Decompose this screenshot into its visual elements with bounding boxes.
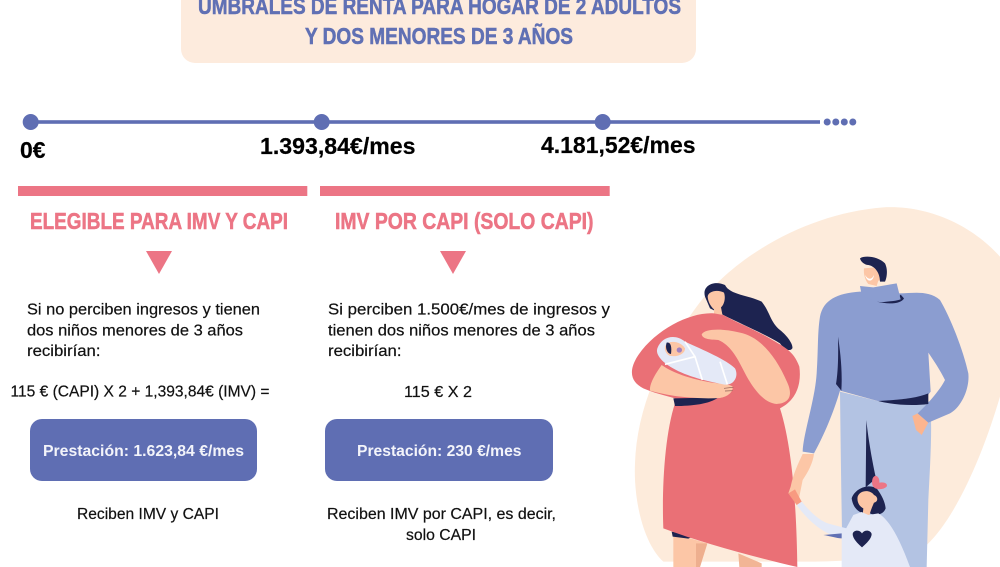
description right: tienen dos niños menores de 3 años	[328, 322, 595, 340]
sweater	[803, 292, 969, 453]
description left: Si no perciben ingresos y tienen	[27, 302, 260, 318]
background blob	[635, 207, 1000, 562]
pants	[840, 392, 931, 567]
hair	[852, 486, 886, 515]
panel heading left: ELEGIBLE PARA IMV Y CAPI	[30, 208, 288, 234]
arrow right	[440, 251, 466, 274]
arrow left	[146, 251, 172, 274]
sweater shadows	[836, 337, 842, 391]
upper arm	[702, 330, 790, 404]
formula right: 115 € X 2	[404, 384, 472, 401]
mother	[632, 283, 800, 567]
title text	[198, 0, 681, 49]
benefit box left	[30, 419, 257, 481]
title banner	[181, 0, 696, 63]
illustration: family	[632, 207, 1000, 567]
threshold label 0: 0€	[20, 137, 46, 163]
title text: Y DOS MENORES DE 3 AÑOS	[305, 22, 573, 49]
note right: Reciben IMV por CAPI, es decir,	[327, 506, 556, 523]
description right: Si perciben 1.500€/mes de ingresos y	[328, 302, 610, 318]
hand in pocket	[912, 413, 928, 435]
child hand	[788, 489, 802, 505]
child	[788, 476, 910, 567]
heart	[853, 531, 872, 547]
sweater	[842, 512, 910, 567]
baby	[657, 337, 736, 385]
income timeline	[23, 114, 856, 130]
head	[864, 267, 884, 286]
bow	[872, 476, 887, 489]
panel heading right: IMV POR CAPI (SOLO CAPI)	[335, 208, 594, 234]
description left: recibirían:	[27, 343, 100, 360]
note right	[327, 506, 556, 544]
description left: dos niños menores de 3 años	[27, 322, 243, 340]
lower arm	[650, 365, 733, 398]
collar	[860, 283, 901, 301]
threshold label 4.181,52: 4.181,52€/mes	[541, 132, 696, 158]
benefit box left: Prestación: 1.623,84 €/mes	[43, 443, 244, 460]
benefit box right: Prestación: 230 €/mes	[357, 443, 522, 460]
legs	[673, 533, 707, 567]
face	[857, 491, 877, 517]
dress	[632, 313, 800, 567]
benefit box right	[325, 419, 553, 481]
threshold label 1.393,84: 1.393,84€/mes	[260, 133, 416, 159]
father	[788, 257, 969, 567]
description right: recibirían:	[328, 343, 402, 360]
hair	[704, 283, 792, 350]
note right: solo CAPI	[406, 527, 476, 544]
panel: IMV por CAPI	[320, 186, 610, 544]
hand holding child	[788, 454, 814, 502]
head	[708, 291, 725, 316]
note left: Reciben IMV y CAPI	[77, 506, 219, 523]
description right	[328, 302, 610, 360]
waist band	[673, 397, 718, 406]
panel: elegible IMV y CAPI	[10, 186, 307, 523]
formula left: 115 € (CAPI) X 2 + 1,393,84€ (IMV) =	[10, 384, 270, 400]
description left	[27, 302, 260, 360]
